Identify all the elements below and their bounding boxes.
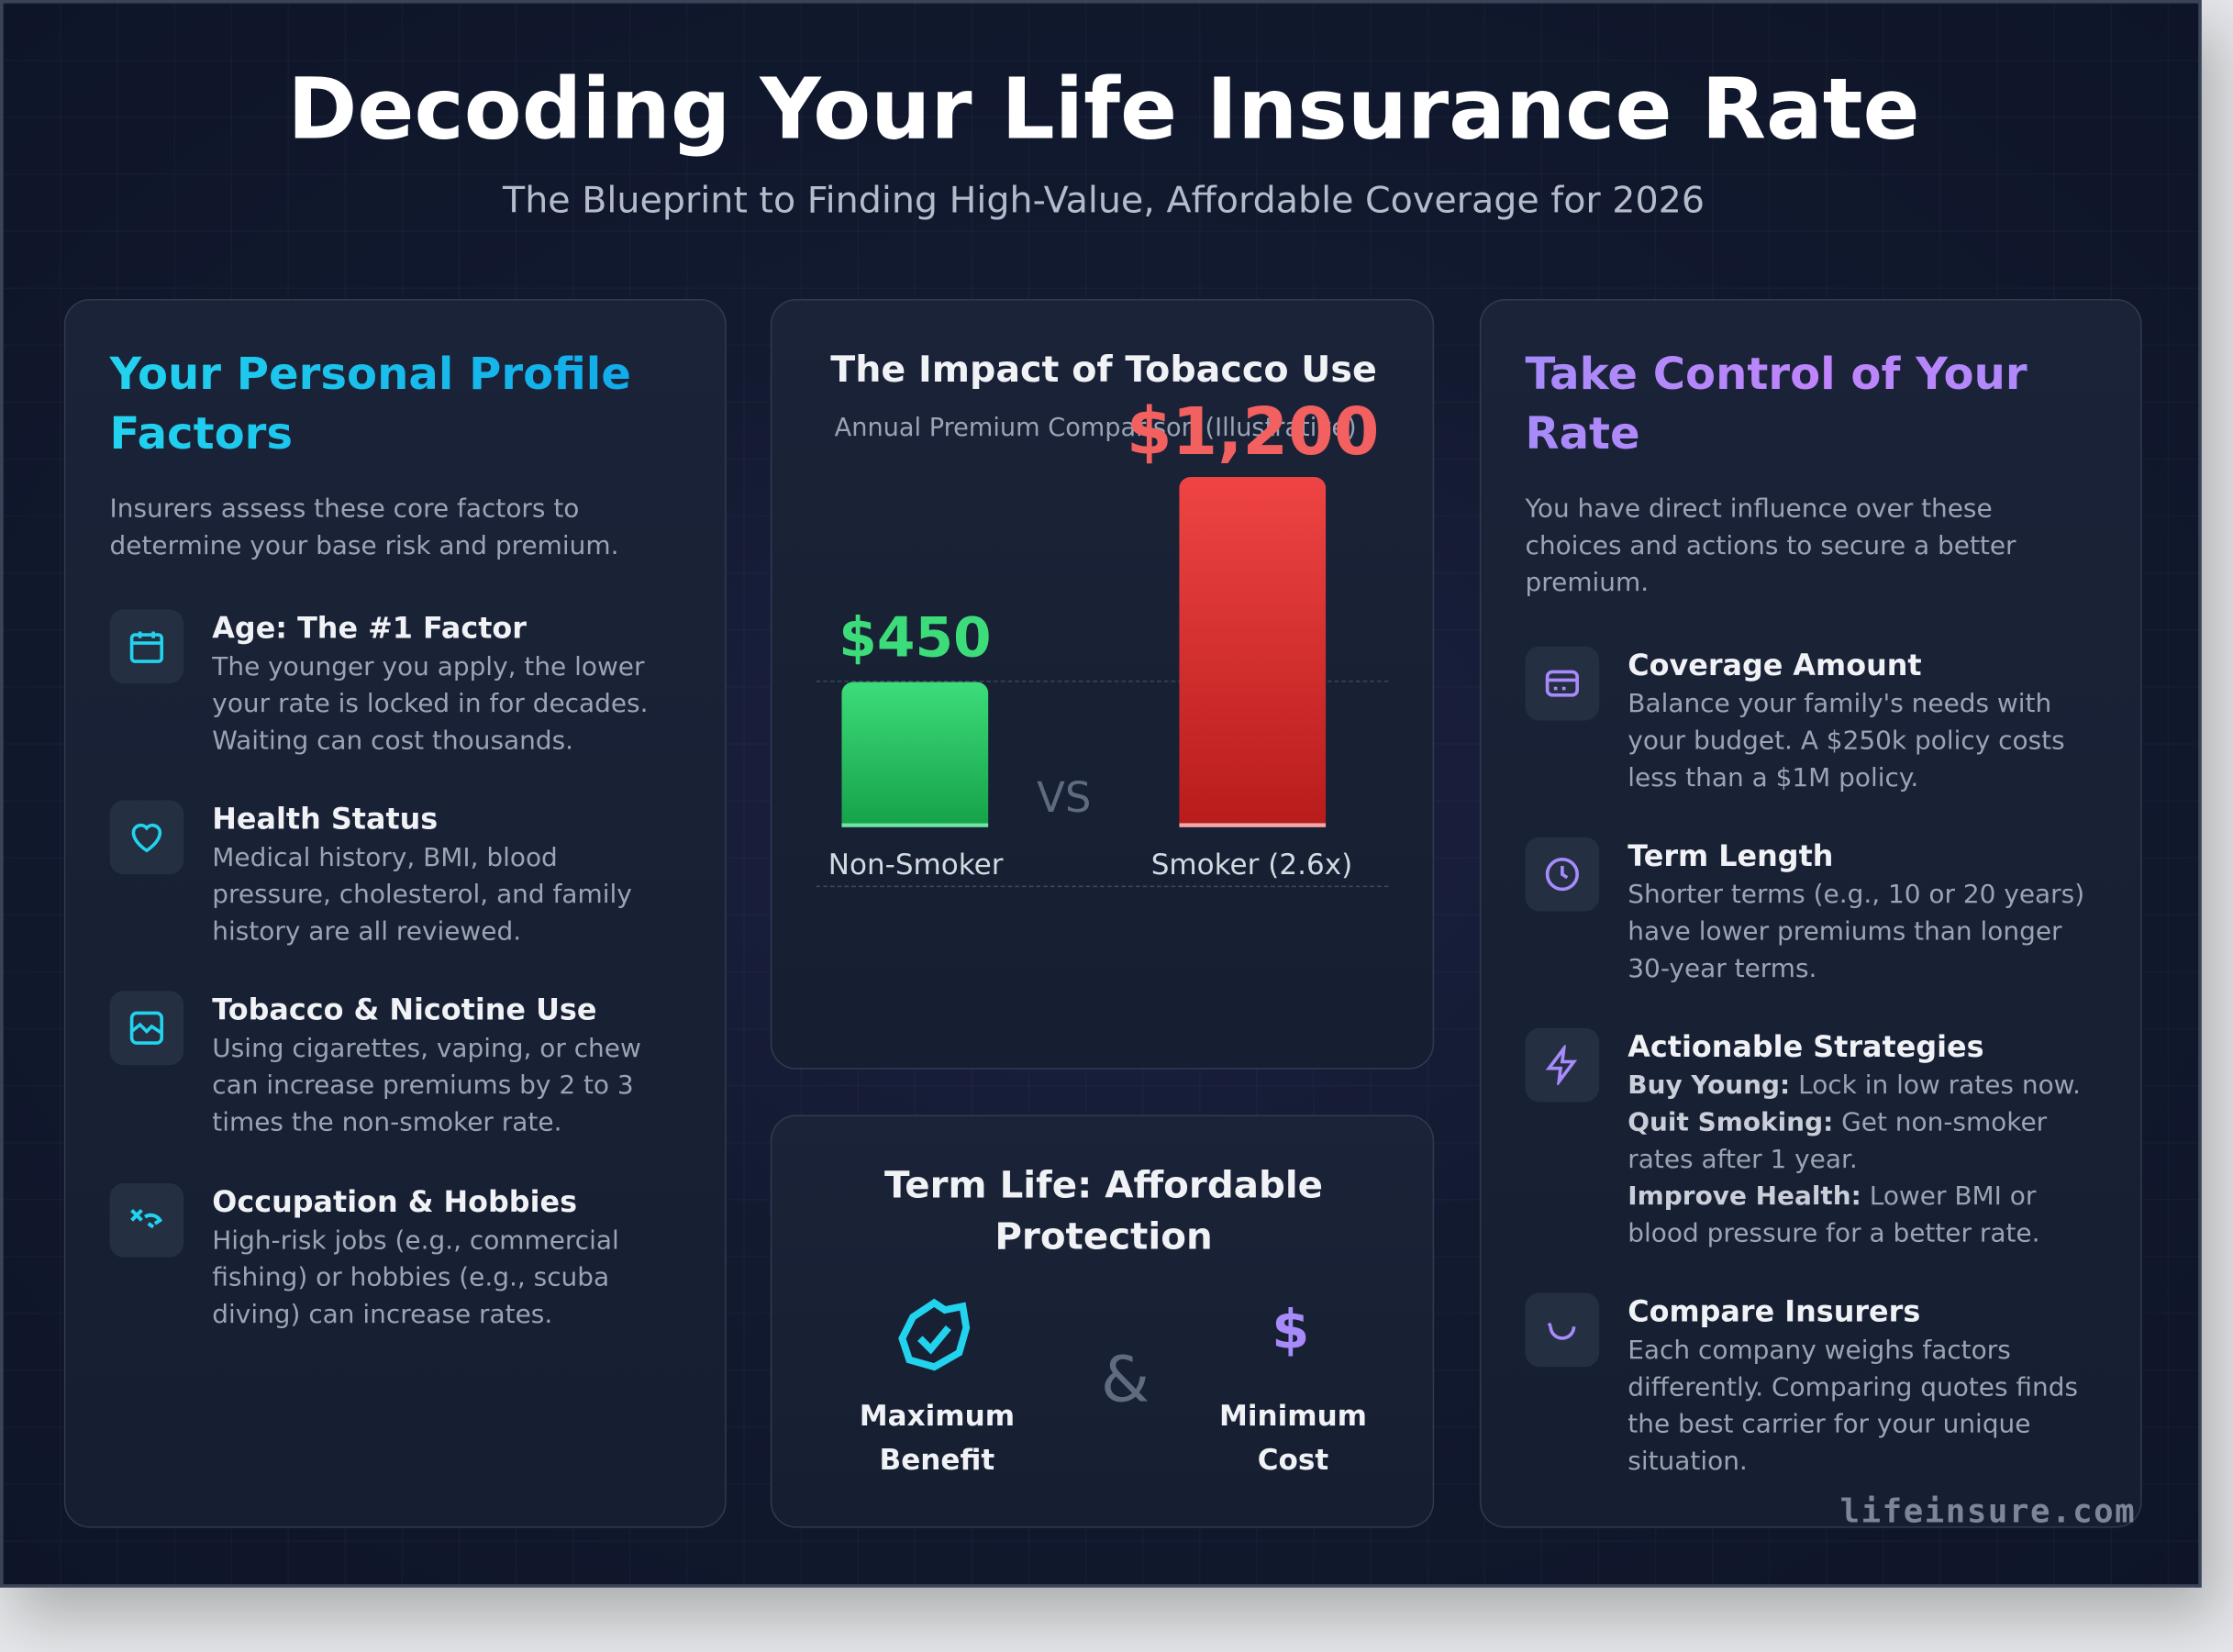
item: strategies: Quit Smoking: Get non-smoker rates after 1 year. [1628, 1108, 2047, 1175]
ampersand: & [1101, 1344, 1150, 1417]
item: strategies: Actionable Strategies [1628, 1029, 1984, 1064]
subtitle: The Blueprint to Finding High-Value, Affordable Coverage for 2026 [503, 180, 1705, 222]
item: tobacco: Tobacco & Nicotine Use [212, 992, 596, 1026]
icon: heart [110, 800, 183, 874]
item: health: Health Status [212, 802, 438, 836]
icon: chart box [110, 991, 183, 1065]
bar: smoker [1179, 477, 1326, 827]
item: term length: Shorter terms (e.g., 10 or 20 years) have lower premiums than longer 30-year terms. [1628, 880, 2084, 984]
item: health [110, 800, 632, 947]
item: occupation: High-risk jobs (e.g., commercial fishing) or hobbies (e.g., scuba diving) can increase rates. [212, 1226, 619, 1330]
label: minimum cost: Cost [1258, 1442, 1328, 1477]
chart subtitle: Annual Premium Comparison (Illustrative) [835, 415, 1357, 443]
item: strategies [1525, 1028, 2081, 1248]
label: smoker: Smoker (2.6x) [1151, 848, 1352, 881]
icon: dollar: $ [1272, 1299, 1309, 1361]
item: term length: Term Length [1628, 838, 1833, 873]
item: tobacco [110, 991, 641, 1137]
item: occupation [110, 1183, 619, 1330]
item: age [110, 609, 648, 756]
label: minimum cost [1219, 1398, 1367, 1477]
panel: take control [1480, 299, 2142, 1528]
intro text: Insurers assess these core factors to determine your base risk and premium. [110, 494, 618, 561]
icon: calendar [110, 609, 183, 683]
icon: bolt [1526, 1028, 1599, 1102]
label: maximum benefit: Benefit [880, 1442, 994, 1477]
icon: refresh [1526, 1292, 1599, 1367]
icon: clock [1526, 837, 1599, 911]
label: minimum cost: Minimum [1219, 1398, 1367, 1433]
term heading [884, 1165, 1323, 1258]
item: term length [1525, 837, 2084, 984]
watermark: lifeinsure.com [1840, 1493, 2136, 1531]
icon: card [1526, 647, 1599, 720]
label: non-smoker: Non-Smoker [828, 848, 1004, 881]
icon: tools [110, 1183, 183, 1258]
item: coverage amount: Balance your family's needs with your budget. A $250k policy costs less than a $1M policy. [1628, 689, 2065, 793]
term heading: Term Life: Affordable [884, 1165, 1323, 1207]
chart heading: The Impact of Tobacco Use [830, 349, 1377, 392]
term heading: Protection [994, 1216, 1213, 1258]
heading: take control: Take Control of Your Rate [1526, 349, 2027, 460]
label: maximum benefit: Maximum [860, 1398, 1015, 1433]
item: occupation: Occupation & Hobbies [212, 1185, 577, 1219]
item: health: Medical history, BMI, blood pressure, cholesterol, and family history are all reviewed. [212, 843, 632, 947]
item: coverage amount: Coverage Amount [1628, 648, 1922, 682]
item: age: The younger you apply, the lower your rate is locked in for decades. Waiting can cost thousands. [212, 652, 648, 756]
icon: shield [898, 1299, 971, 1370]
item: compare: Compare Insurers [1628, 1294, 1920, 1328]
label: maximum benefit [860, 1398, 1015, 1477]
item: strategies: Improve Health: Lower BMI or blood pressure for a better rate. [1628, 1181, 2040, 1248]
panel: term life [771, 1114, 1434, 1528]
item: tobacco: Using cigarettes, vaping, or chew can increase premiums by 2 to 3 times the non-smoker rate. [212, 1034, 641, 1137]
heading: personal profile: Your Personal Profile Factors [110, 349, 631, 460]
panel: tobacco impact chart [771, 299, 1434, 1070]
bar: non-smoker [841, 682, 988, 827]
item: compare [1525, 1293, 2078, 1477]
value: 1200: $1,200 [1127, 393, 1379, 470]
title: Decoding Your Life Insurance Rate [287, 60, 1920, 158]
item: compare: Each company weighs factors differently. Comparing quotes finds the best carrier for your unique situation. [1628, 1336, 2078, 1477]
bar chart [817, 393, 1389, 888]
intro text: You have direct influence over these choices and actions to secure a better premium. [1526, 494, 2016, 598]
value: 450: $450 [839, 606, 992, 671]
item: coverage amount [1525, 647, 2065, 793]
item: strategies: Buy Young: Lock in low rates now. [1628, 1070, 2081, 1101]
panel: personal profile factors [64, 299, 727, 1528]
vs: VS [1037, 773, 1091, 822]
item: age: Age: The #1 Factor [212, 611, 527, 645]
